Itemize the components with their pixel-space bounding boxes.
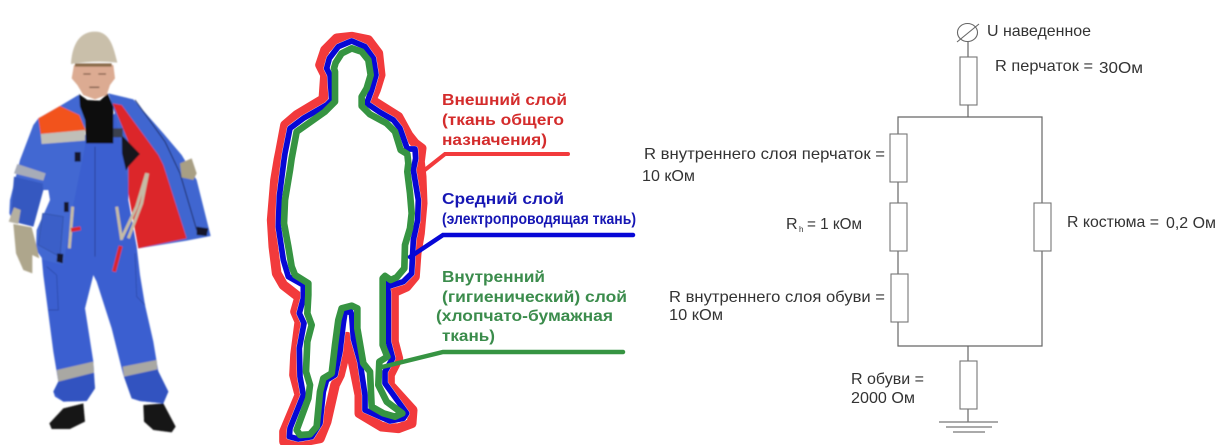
leader line: outer layer	[421, 154, 568, 173]
open jacket flap	[108, 93, 211, 248]
hanging straps	[69, 173, 148, 248]
trouser reflective bands	[57, 360, 157, 382]
right glove	[180, 158, 197, 180]
label: middle layer: (электропроводящая ткань)	[442, 211, 636, 228]
coverall torso and trousers	[42, 113, 168, 403]
circuit diagram	[642, 23, 1216, 432]
resistors	[890, 57, 1051, 409]
circuit labels: 10 кОм	[669, 307, 723, 324]
trouser pockets	[47, 253, 145, 310]
ground symbol	[939, 422, 998, 432]
label: outer layer: назначения)	[442, 132, 547, 149]
face	[72, 65, 115, 99]
circuit labels: 0,2 Ом	[1166, 215, 1216, 232]
jacket left side with sleeve	[9, 95, 85, 265]
sleeve reflective band	[14, 164, 46, 181]
label: inner layer: (гигиенический) слой	[442, 289, 627, 306]
wires	[898, 42, 1042, 422]
sleeve shadow	[12, 177, 43, 227]
trouser shading	[53, 369, 168, 403]
label: outer layer: (ткань общего	[442, 112, 564, 129]
black tabs	[57, 152, 208, 263]
red lining	[113, 103, 187, 248]
facial features	[83, 74, 106, 87]
white gap around blue	[278, 41, 418, 439]
circuit labels: R костюма =	[1067, 214, 1159, 231]
circuit labels: R перчаток =	[995, 58, 1093, 75]
label: middle layer	[442, 191, 636, 228]
layered silhouette outline	[272, 37, 423, 442]
shoulder reflective band	[41, 130, 85, 144]
circuit labels: R внутреннего слоя перчаток =	[644, 146, 885, 163]
sleeve cuff	[9, 207, 21, 224]
flap seam	[135, 100, 197, 230]
label: middle layer: Средний слой	[442, 191, 564, 208]
label: outer layer: Внешний слой	[442, 92, 567, 109]
circuit labels: h	[799, 225, 803, 234]
neck collar	[79, 93, 113, 143]
chest strap	[113, 128, 123, 137]
label: inner layer: Внутренний	[442, 269, 545, 286]
circuit labels: = 1 кОм	[807, 216, 862, 233]
orange shoulder patch	[38, 106, 86, 134]
circuit labels: R	[786, 216, 798, 233]
boots	[49, 403, 176, 432]
circuit labels: R обуви =	[851, 371, 924, 388]
circuit labels: U наведенное	[987, 23, 1091, 40]
circuit labels: R внутреннего слоя обуви =	[669, 289, 885, 306]
circuit labels: 30Ом	[1099, 60, 1143, 77]
helmet	[71, 32, 117, 64]
photo: worker in protective suit	[9, 32, 211, 432]
red straps	[71, 228, 121, 272]
black inner lining	[122, 135, 140, 171]
green inner layer	[284, 48, 412, 435]
circuit labels	[642, 23, 1216, 407]
hair line	[75, 63, 112, 67]
leader line: inner layer	[382, 352, 623, 367]
blue middle layer	[278, 41, 418, 439]
red outer layer	[272, 37, 423, 442]
source symbol	[957, 24, 979, 42]
label: inner layer: (хлопчато-бумажная	[436, 308, 613, 325]
zipper line	[93, 147, 96, 257]
label: inner layer: ткань)	[442, 328, 495, 345]
circuit labels: 10 кОм	[642, 168, 695, 185]
label: inner layer	[436, 269, 627, 345]
label: outer layer	[442, 92, 567, 149]
jacket pocket	[38, 213, 63, 257]
leader line: middle layer	[410, 235, 633, 257]
left glove	[13, 224, 39, 273]
circuit labels: 2000 Ом	[851, 390, 915, 407]
